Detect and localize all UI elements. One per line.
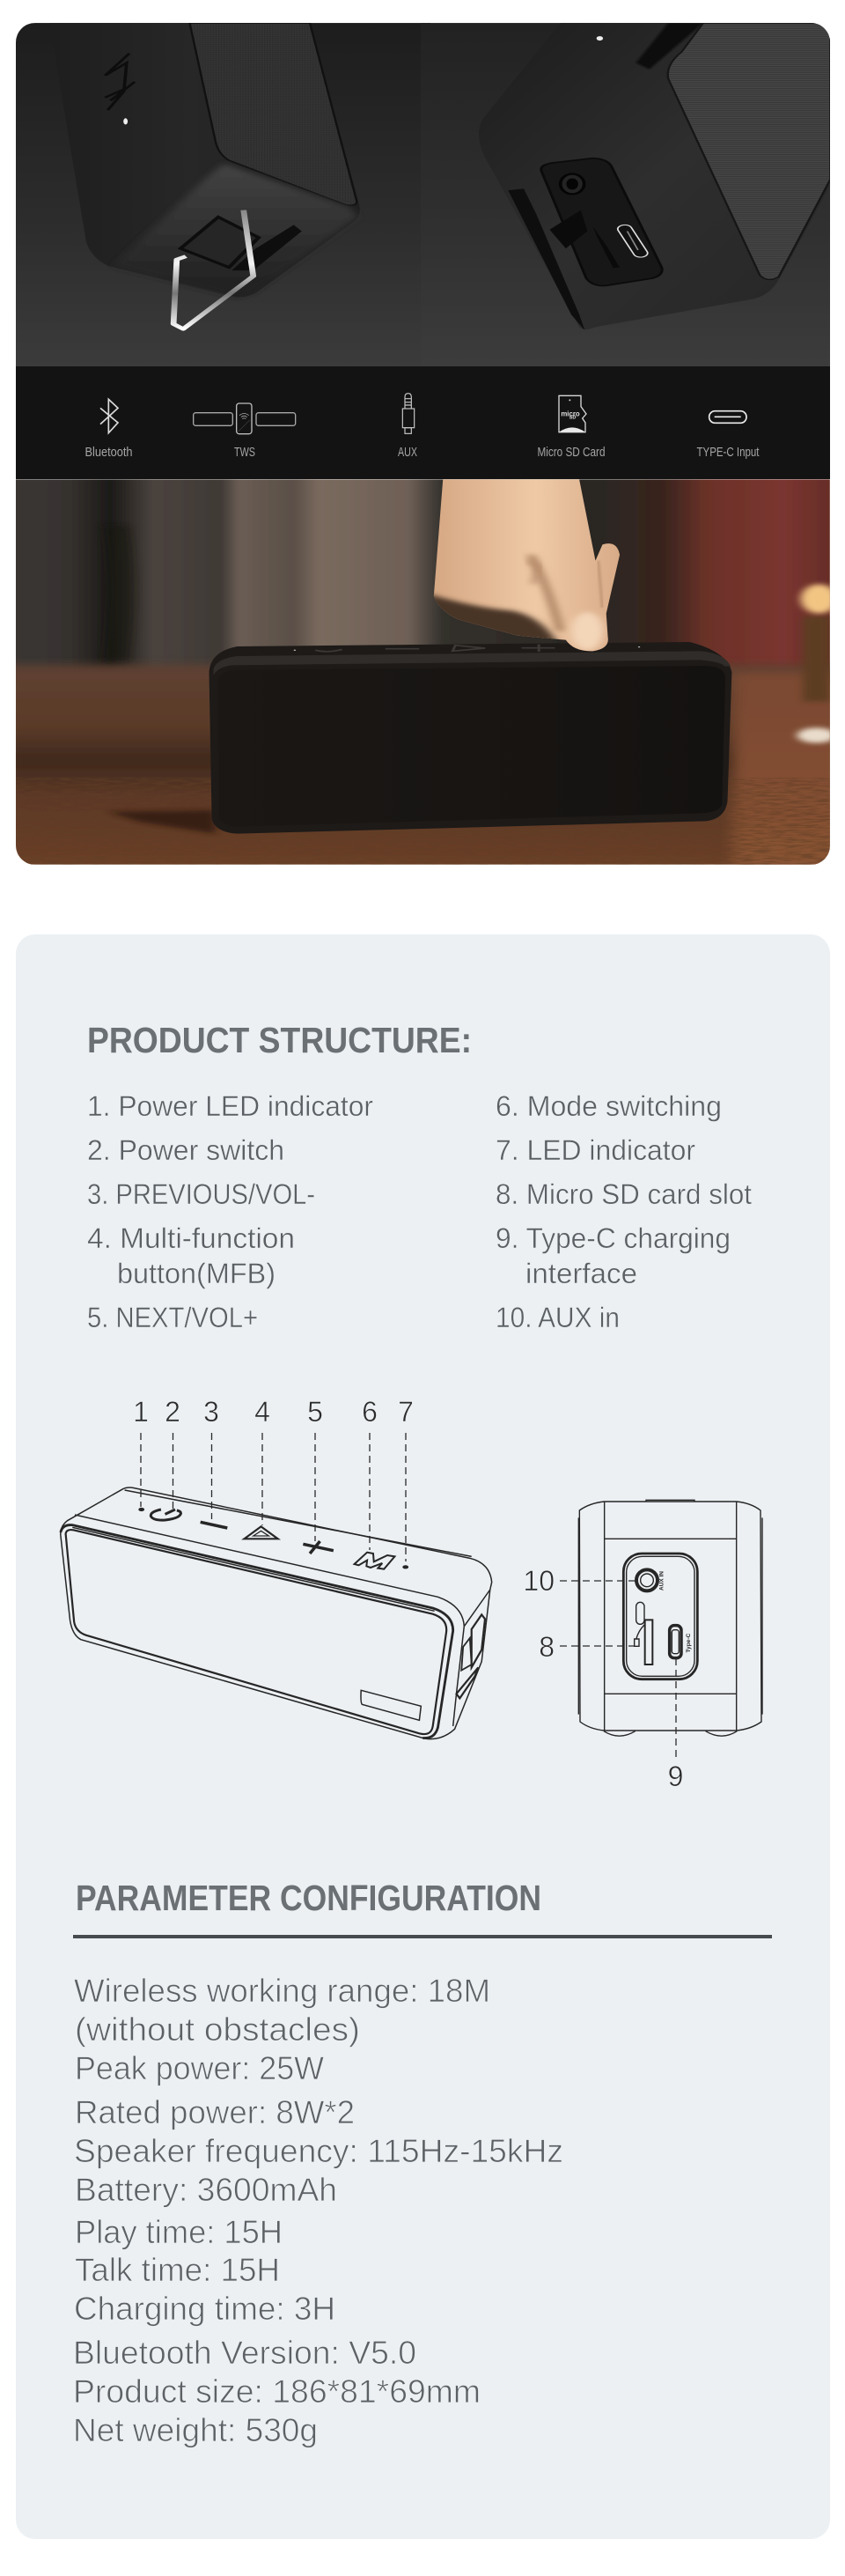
text block: parameter list: Play time: 15H	[75, 2214, 283, 2250]
callouts: numbers 1 to 7 with dashed leaders: 1	[133, 1396, 149, 1428]
icon: AUX jack	[402, 394, 415, 433]
divider rule	[73, 1935, 772, 1938]
callouts: numbers 1 to 7 with dashed leaders: 7	[398, 1396, 414, 1428]
icon: Bluetooth	[100, 399, 118, 433]
heading: parameter configuration: PARAMETER CONFIGURATION	[76, 1878, 541, 1918]
list: structure items right	[496, 1090, 752, 1333]
callouts: numbers 8 to 10 with dashed leaders: 9	[668, 1760, 683, 1792]
list: structure items right: interface	[525, 1258, 637, 1289]
photo: hand pressing button	[426, 479, 620, 651]
icon: Micro SD card: micro	[561, 410, 580, 418]
label: TWS: TWS	[234, 446, 255, 460]
photo: curtain and table background	[0, 467, 845, 878]
icon: Type-C port	[709, 411, 746, 423]
photo: background left	[16, 23, 430, 366]
callouts: numbers 1 to 7 with dashed leaders: 5	[307, 1396, 323, 1428]
text block: parameter list: Charging time: 3H	[74, 2291, 335, 2327]
label: Bluetooth: Bluetooth	[84, 446, 132, 460]
callouts: numbers 1 to 7 with dashed leaders: 3	[203, 1396, 219, 1428]
photo: speaker with open ports	[479, 23, 830, 330]
label: TYPE-C Input: TYPE-C Input	[697, 446, 759, 460]
heading: product structure: PRODUCT STRUCTURE:	[87, 1020, 472, 1060]
text block: parameter list: Rated power: 8W*2	[75, 2094, 355, 2130]
panel: top photos of speaker	[16, 23, 830, 366]
text block: parameter list: (without obstacles)	[75, 2011, 360, 2048]
photo: black speaker	[209, 642, 731, 834]
diagram: speaker end view with ports	[578, 1500, 762, 1736]
photo: candle at right	[797, 584, 837, 743]
text block: parameter list: Peak power: 25W	[75, 2050, 324, 2086]
icon: Micro SD card: SD	[569, 416, 577, 421]
label: Micro SD Card: Micro SD Card	[537, 446, 606, 460]
list: structure items left: button(MFB)	[117, 1258, 276, 1289]
callouts: numbers 1 to 7 with dashed leaders	[133, 1396, 414, 1561]
icon: Micro SD card	[559, 395, 586, 432]
list: structure items left: 1. Power LED indicator	[87, 1090, 373, 1122]
list: structure items left: 5. NEXT/VOL+	[87, 1302, 258, 1333]
icon: TWS	[194, 403, 296, 434]
text block: parameter list: Talk time: 15H	[75, 2252, 280, 2288]
callouts: numbers 1 to 7 with dashed leaders: 2	[165, 1396, 180, 1428]
diagram: speaker end view with ports: Type-C	[687, 1633, 692, 1653]
list: structure items right: 9. Type-C charging	[496, 1222, 731, 1254]
text block: parameter list: Speaker frequency: 115Hz-15kHz	[74, 2133, 563, 2169]
callouts: numbers 1 to 7 with dashed leaders: 6	[362, 1396, 378, 1428]
photo: speaker with carry ring	[49, 23, 360, 329]
list: structure items right: 8. Micro SD card slot	[496, 1178, 752, 1210]
callouts: numbers 8 to 10 with dashed leaders	[523, 1565, 683, 1792]
text block: parameter list: Bluetooth Version: V5.0	[73, 2335, 416, 2371]
text block: parameter list: Net weight: 530g	[73, 2412, 318, 2448]
list: structure items left	[87, 1090, 373, 1333]
label: AUX: AUX	[398, 446, 417, 460]
list: structure items left: 4. Multi-function	[87, 1222, 295, 1254]
panel: product structure and parameters	[16, 934, 830, 2539]
panel: product photo card	[0, 23, 845, 878]
panel: lifestyle photo with hand on speaker	[0, 467, 845, 878]
list: structure items left: 2. Power switch	[87, 1134, 284, 1166]
callouts: numbers 8 to 10 with dashed leaders: 8	[539, 1631, 555, 1663]
list: structure items right: 10. AUX in	[496, 1302, 620, 1333]
list: structure items right: 7. LED indicator	[496, 1134, 695, 1166]
text block: parameter list: Battery: 3600mAh	[75, 2172, 337, 2208]
list: structure items left: 3. PREVIOUS/VOL-	[87, 1178, 315, 1210]
text block: parameter list: Wireless working range: 18M	[74, 1973, 490, 2009]
list: structure items right: 6. Mode switching	[496, 1090, 722, 1122]
diagram: speaker end view with ports: AUX IN	[658, 1571, 665, 1591]
panel: feature icon strip	[16, 366, 830, 479]
text block: parameter list: Product size: 186*81*69mm	[73, 2373, 481, 2410]
callouts: numbers 1 to 7 with dashed leaders: 4	[254, 1396, 270, 1428]
diagram: speaker line art	[61, 1487, 492, 1739]
callouts: numbers 8 to 10 with dashed leaders: 10	[523, 1565, 555, 1597]
photo: background right	[421, 23, 830, 366]
text block: parameter list	[73, 1973, 563, 2448]
